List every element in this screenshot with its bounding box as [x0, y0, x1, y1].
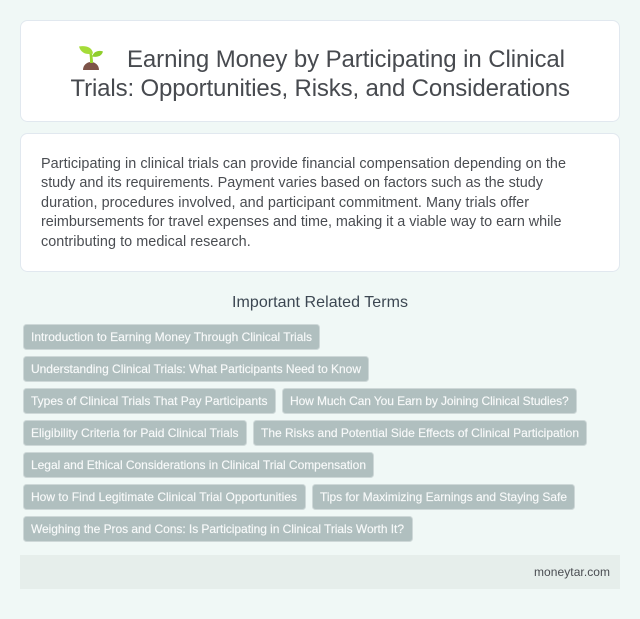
footer bar: [20, 555, 620, 589]
tag: [312, 484, 574, 510]
tag: [24, 420, 246, 446]
description text: study and its requirements. Payment varies based on factors such as the study: [41, 175, 544, 191]
description text: contributing to medical research.: [41, 234, 251, 250]
tag: [24, 484, 306, 510]
tag: The Risks and Potential Side Effects of Clinical Participation: [261, 426, 579, 440]
tag: [24, 452, 374, 478]
tag: Types of Clinical Trials That Pay Participants: [31, 394, 268, 408]
tag: Understanding Clinical Trials: What Participants Need to Know: [31, 362, 361, 376]
heading: important related terms: Important Related Terms: [232, 294, 408, 311]
tag: Tips for Maximizing Earnings and Staying Safe: [320, 490, 567, 504]
tag: Eligibility Criteria for Paid Clinical Trials: [31, 426, 238, 440]
title text: [70, 46, 570, 102]
tag: Weighing the Pros and Cons: Is Participating in Clinical Trials Worth It?: [31, 522, 404, 536]
title text: Trials: Opportunities, Risks, and Considerations: [70, 75, 570, 102]
panel: related term tags: [24, 324, 586, 542]
description text: duration, procedures involved, and participant commitment. Many trials offer: [41, 195, 529, 211]
tag: How to Find Legitimate Clinical Trial Opportunities: [31, 490, 297, 504]
description text: Participating in clinical trials can provide financial compensation depending on the: [41, 156, 566, 172]
panel: description card: [20, 134, 620, 272]
tag: [24, 356, 368, 382]
description text: reimbursements for travel expenses and time, making it a viable way to earn while: [41, 214, 562, 230]
icon: sprout: [79, 46, 103, 70]
tag: [24, 516, 412, 542]
tag: [254, 420, 586, 446]
description text: [41, 156, 566, 250]
tag: How Much Can You Earn by Joining Clinical Studies?: [290, 394, 569, 408]
tag: [282, 388, 576, 414]
footer source text: moneytar.com: [534, 565, 610, 579]
tag: [24, 388, 276, 414]
panel: title card: [20, 20, 620, 122]
title text: Earning Money by Participating in Clinical: [127, 46, 565, 73]
tag: [24, 324, 320, 350]
tag: Introduction to Earning Money Through Clinical Trials: [31, 330, 312, 344]
tag: Legal and Ethical Considerations in Clinical Trial Compensation: [31, 458, 366, 472]
